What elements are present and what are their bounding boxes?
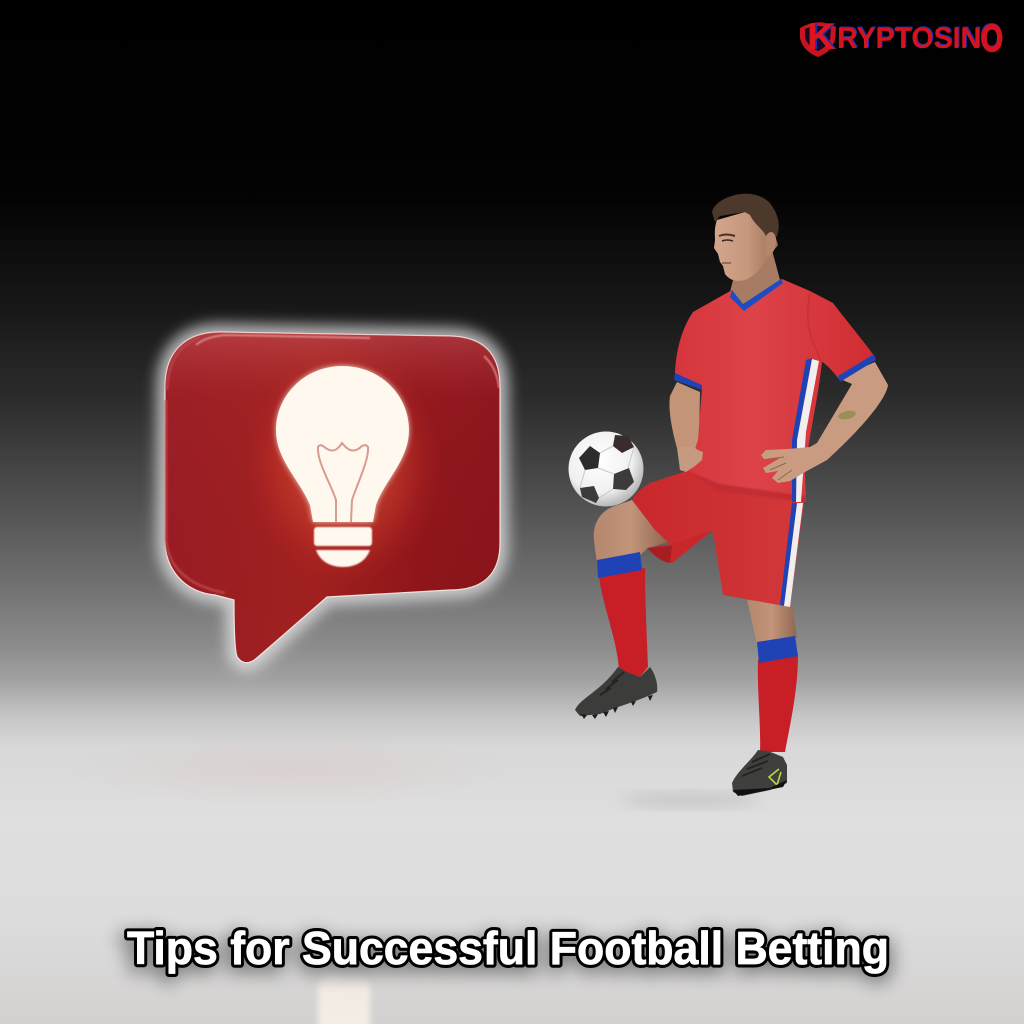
logo wordmark: RYPTOSIN bbox=[837, 22, 981, 55]
mouth bbox=[722, 262, 731, 264]
shirt bbox=[674, 279, 876, 502]
bubble top highlight bbox=[196, 335, 370, 345]
logo: Kryptosino bbox=[800, 16, 1003, 60]
soccer ball bbox=[568, 432, 644, 506]
standing leg sock bbox=[758, 655, 798, 752]
shorts bbox=[632, 470, 804, 607]
logo wordmark shadow: RYPTOSIN bbox=[838, 21, 982, 54]
right hand and forearm bbox=[761, 443, 832, 483]
shirt collar bbox=[730, 279, 783, 311]
bubble right highlight bbox=[484, 356, 499, 388]
logo final O: O bbox=[981, 18, 1003, 60]
bubble outer glow bbox=[165, 332, 500, 663]
shirt side stripes bbox=[792, 358, 812, 502]
title: Tips for Successful Football Betting bbox=[127, 922, 889, 974]
brow bbox=[719, 234, 735, 236]
logo K shadow: K bbox=[809, 16, 837, 57]
left sleeve cuff bbox=[674, 373, 702, 390]
shorts stripes bbox=[780, 503, 798, 606]
standing leg skin bbox=[747, 600, 797, 644]
hair bbox=[712, 194, 779, 238]
left hand bbox=[678, 446, 703, 472]
raised leg skin bbox=[594, 500, 668, 562]
logo K: K bbox=[807, 16, 835, 57]
tattoo bbox=[837, 409, 857, 421]
bubble left edge bbox=[166, 337, 225, 593]
standing leg sock band bbox=[757, 636, 798, 663]
floor reflection of speech bubble bbox=[70, 734, 510, 806]
logo shield bbox=[800, 22, 836, 57]
raised leg sock bbox=[599, 568, 648, 677]
logo final O shadow: O bbox=[980, 17, 1003, 59]
ear bbox=[765, 231, 776, 256]
panel: speech bubble with light bulb bbox=[165, 332, 500, 663]
neck bbox=[730, 250, 780, 310]
right upper arm bbox=[810, 362, 888, 460]
player floor shadow bbox=[620, 793, 760, 807]
raised boot bbox=[575, 667, 657, 719]
icon: light bulb bbox=[276, 366, 409, 567]
eye bbox=[722, 240, 733, 241]
raised leg sock band bbox=[597, 552, 642, 578]
head bbox=[712, 194, 779, 281]
title shadow: Tips for Successful Football Betting bbox=[123, 927, 891, 979]
logo shield inner bbox=[805, 26, 831, 51]
player bbox=[568, 194, 888, 796]
left upper arm bbox=[669, 382, 700, 470]
title outline: Tips for Successful Football Betting bbox=[127, 922, 889, 974]
shirt hem shade bbox=[690, 472, 806, 502]
bulb halo bbox=[243, 343, 443, 587]
floor light reflection bbox=[318, 972, 370, 1024]
standing boot bbox=[732, 750, 787, 796]
bubble gloss bbox=[165, 332, 500, 663]
bubble body bbox=[165, 332, 500, 663]
right sleeve cuff bbox=[838, 354, 876, 382]
